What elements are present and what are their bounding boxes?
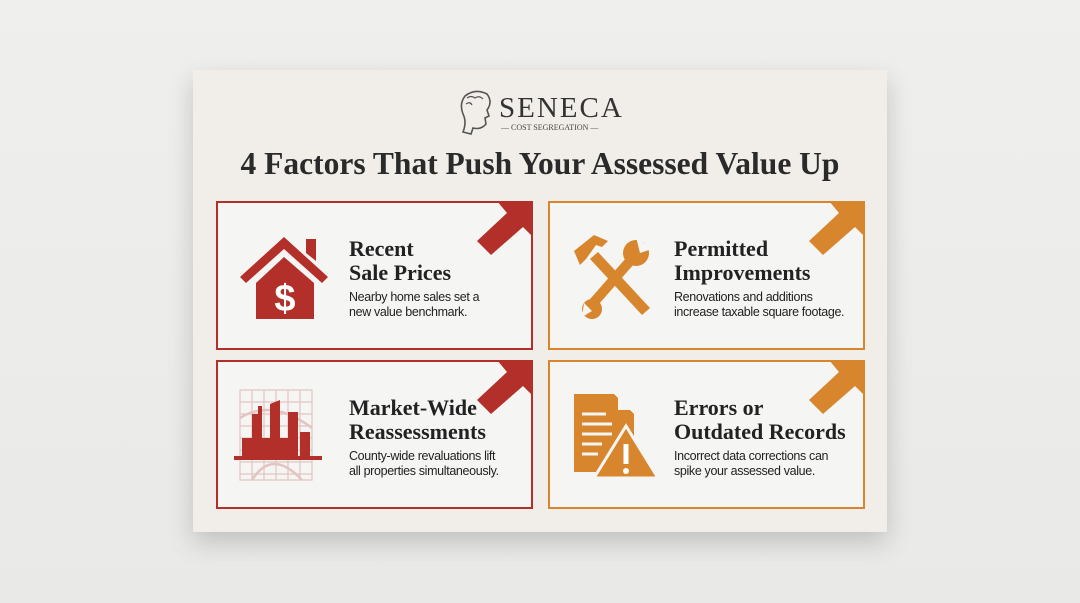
text: all properties simultaneously. — [349, 464, 499, 478]
heading: Market-Wide — [349, 395, 477, 420]
heading: Permitted — [674, 236, 768, 261]
icon: document warning — [574, 394, 656, 476]
arrow — [477, 362, 531, 414]
heading: Sale Prices — [349, 260, 451, 285]
heading: Outdated Records — [674, 419, 846, 444]
arrow — [809, 203, 863, 255]
panel: market-wide reassessments — [216, 360, 533, 509]
panel: recent sale prices — [216, 201, 533, 350]
text — [349, 290, 480, 319]
text: new value benchmark. — [349, 305, 467, 319]
heading — [349, 395, 486, 444]
card — [193, 70, 887, 532]
icon: house dollar: $ — [274, 278, 296, 320]
text: spike your assessed value. — [674, 464, 815, 478]
text: County-wide revaluations lift — [349, 449, 495, 463]
text — [674, 449, 828, 478]
panel: errors or outdated records — [548, 360, 865, 509]
arrow — [809, 362, 863, 414]
heading: Reassessments — [349, 419, 486, 444]
text: Nearby home sales set a — [349, 290, 479, 304]
icon: tools — [574, 235, 650, 319]
heading — [349, 236, 451, 285]
heading: Recent — [349, 236, 414, 261]
logo: — COST SEGREGATION — — [501, 123, 598, 132]
heading: Improvements — [674, 260, 810, 285]
text — [674, 290, 844, 319]
icon: city map — [234, 389, 322, 481]
heading — [674, 236, 810, 285]
logo text: SENECA — [499, 92, 624, 124]
text: Renovations and additions — [674, 290, 813, 304]
icon: house dollar — [240, 237, 328, 320]
text — [349, 449, 499, 478]
text: Incorrect data corrections can — [674, 449, 828, 463]
panel: permitted improvements — [548, 201, 865, 350]
text: increase taxable square footage. — [674, 305, 844, 319]
title: 4 Factors That Push Your Assessed Value Up — [241, 146, 839, 181]
icon: bust — [460, 90, 491, 135]
arrow — [477, 203, 531, 255]
heading: Errors or — [674, 395, 763, 420]
heading — [674, 395, 846, 444]
logo — [460, 90, 624, 135]
